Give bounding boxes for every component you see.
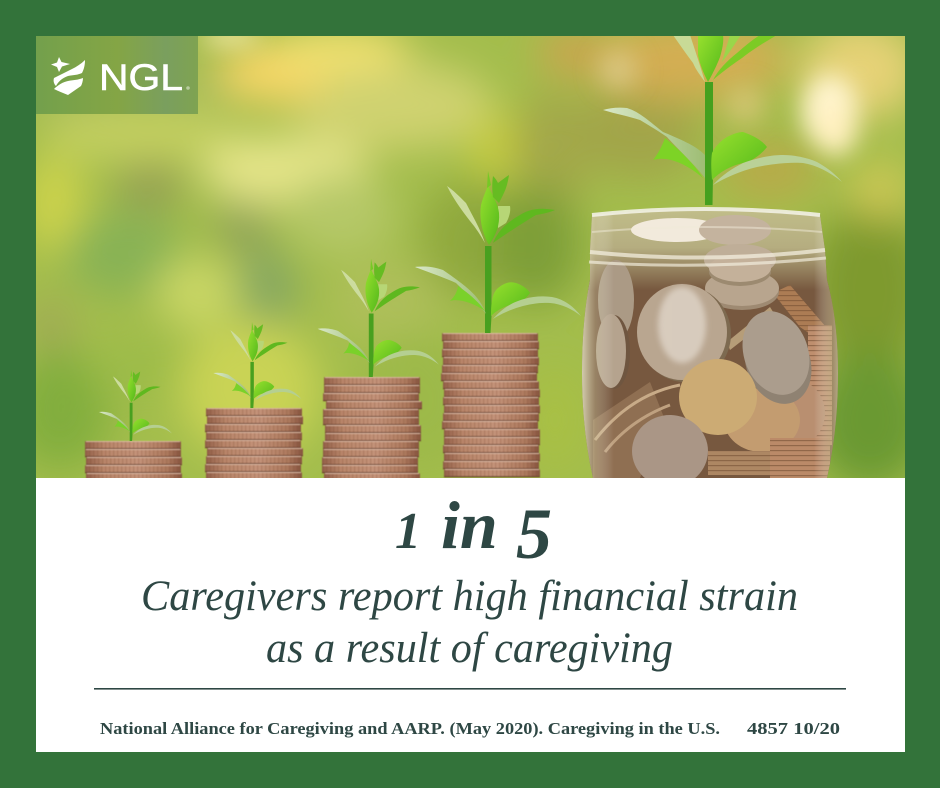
coin stack 3	[322, 377, 422, 481]
source citation: National Alliance for Caregiving and AARP. (May 2020). Caregiving in the U.S.	[100, 719, 720, 738]
seedling 1	[99, 370, 172, 441]
coin stack 1	[85, 441, 182, 481]
logo wordmark: NGL	[99, 57, 183, 98]
subheading line 1: Caregivers report high financial strain	[141, 573, 798, 620]
headline statistic: 1	[395, 503, 421, 560]
headline statistic: 5	[516, 494, 552, 574]
coin stack 2	[205, 408, 303, 480]
seedling 3	[318, 259, 439, 377]
photo: plants growing from coin stacks	[36, 36, 905, 478]
registered mark	[186, 86, 190, 90]
glass jar filled with coins	[580, 205, 840, 487]
divider rule	[94, 688, 846, 690]
logo panel	[36, 36, 198, 114]
logo icon: star and swoosh	[51, 57, 85, 95]
seedling 2	[213, 322, 301, 408]
subheading line 2: as a result of caregiving	[266, 625, 673, 672]
large plant growing from jar	[603, 35, 842, 205]
coin stack 4	[441, 333, 540, 477]
document code: 4857 10/20	[747, 719, 840, 738]
seedling 4	[415, 171, 581, 333]
headline statistic: in	[441, 487, 498, 563]
blurred photo background	[36, 36, 905, 478]
white text panel	[36, 478, 905, 752]
